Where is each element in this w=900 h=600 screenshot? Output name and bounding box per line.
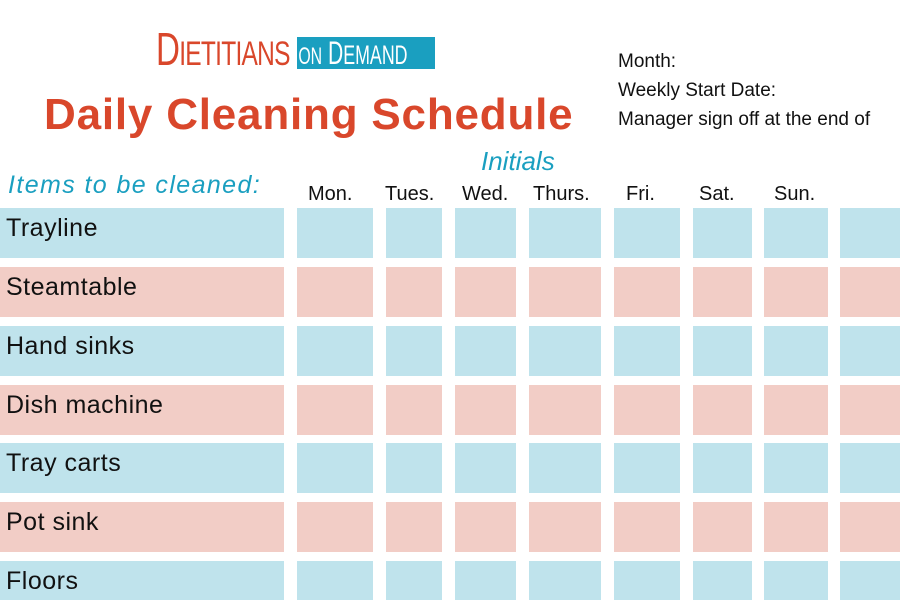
day headers: Wed. (462, 183, 508, 205)
schedule grid: Trayline (6, 214, 98, 242)
items heading: Items to be cleaned: (8, 171, 261, 199)
initials heading: Initials (481, 146, 555, 176)
day headers: Thurs. (533, 183, 590, 205)
day headers: Mon. (308, 183, 352, 205)
logo: DIETITIANS (156, 23, 290, 75)
day headers: Sat. (699, 183, 735, 205)
schedule grid: Pot sink (6, 508, 99, 536)
info fields (618, 51, 870, 130)
day headers (308, 183, 815, 205)
schedule grid: Dish machine (6, 391, 163, 419)
schedule grid: Steamtable (6, 273, 137, 301)
schedule grid: Tray carts (6, 449, 121, 477)
schedule grid (0, 208, 900, 600)
day headers: Tues. (385, 183, 434, 205)
logo (156, 23, 435, 75)
day headers: Fri. (626, 183, 655, 205)
info fields: Month: (618, 51, 676, 72)
schedule grid: Hand sinks (6, 332, 135, 360)
info fields: Manager sign off at the end of (618, 109, 870, 130)
info fields: Weekly Start Date: (618, 80, 776, 101)
day headers: Sun. (774, 183, 815, 205)
schedule grid: Floors (6, 567, 78, 595)
title: Daily Cleaning Schedule (44, 90, 573, 139)
